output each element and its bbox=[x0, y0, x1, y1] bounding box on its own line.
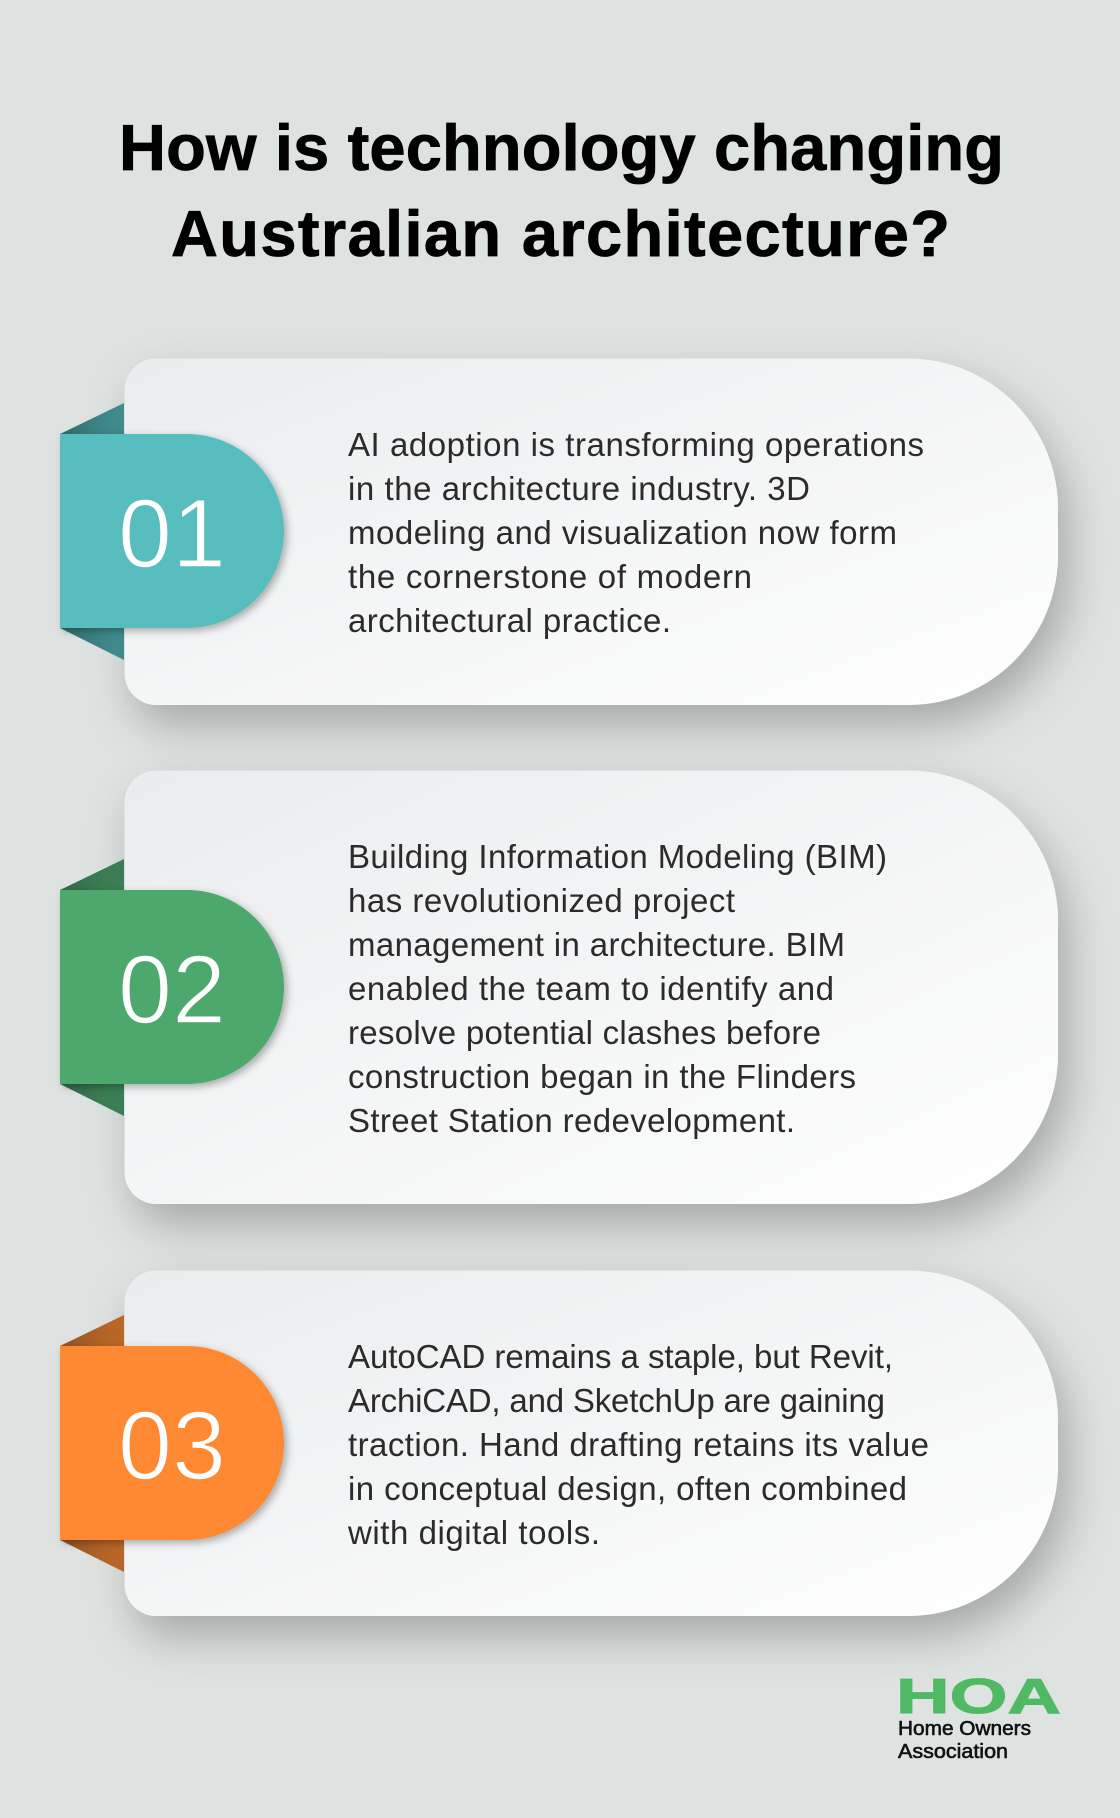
text: step 01: AI adoption is transforming operations bbox=[348, 426, 924, 463]
text: step 02: has revolutionized project bbox=[348, 882, 735, 919]
ribbon fold: step 02 bbox=[60, 859, 124, 1116]
text: step 03 bbox=[347, 1338, 929, 1551]
panel: step 03 bbox=[60, 1270, 1058, 1616]
text: step 02: enabled the team to identify and bbox=[348, 970, 834, 1007]
text: step 02: resolve potential clashes before bbox=[348, 1014, 821, 1051]
text: step 02: construction began in the Flinders bbox=[348, 1058, 856, 1095]
number: 03: 03 bbox=[118, 1391, 226, 1500]
text: step 01 bbox=[348, 426, 924, 639]
title: How is technology changing bbox=[119, 111, 1004, 184]
title bbox=[119, 111, 1004, 270]
text: step 03: ArchiCAD, and SketchUp are gaining bbox=[348, 1382, 885, 1419]
text: step 02 bbox=[348, 838, 887, 1139]
logo: HOA bbox=[896, 1670, 1061, 1763]
badge: step 03 bbox=[60, 1346, 284, 1540]
badge: step 02 bbox=[60, 890, 284, 1084]
logo: HOA: Home Owners bbox=[898, 1718, 1031, 1740]
card: step 02 bbox=[124, 770, 1058, 1204]
card: step 01 bbox=[124, 358, 1058, 705]
badge: step 01 bbox=[60, 434, 284, 628]
text: step 02: Building Information Modeling (BIM) bbox=[348, 838, 887, 875]
text: step 03: AutoCAD remains a staple, but Revit, bbox=[348, 1338, 893, 1375]
number: 02: 02 bbox=[118, 935, 226, 1044]
card: step 03 bbox=[124, 1270, 1058, 1616]
title: Australian architecture? bbox=[171, 197, 950, 270]
text: step 02: Street Station redevelopment. bbox=[348, 1102, 795, 1139]
text: step 02: management in architecture. BIM bbox=[348, 926, 845, 963]
ribbon fold: step 01 bbox=[60, 403, 124, 660]
text: step 01: the cornerstone of modern bbox=[348, 558, 752, 595]
text: step 01: modeling and visualization now form bbox=[348, 514, 897, 551]
text: step 03: with digital tools. bbox=[347, 1514, 600, 1551]
ribbon fold: step 03 bbox=[60, 1315, 124, 1572]
text: step 03: in conceptual design, often combined bbox=[348, 1470, 907, 1507]
logo: HOA: Association bbox=[898, 1741, 1008, 1763]
text: step 01: in the architecture industry. 3D bbox=[348, 470, 810, 507]
panel: step 02 bbox=[60, 770, 1058, 1204]
panel: step 01 bbox=[60, 358, 1058, 705]
text: step 03: traction. Hand drafting retains its value bbox=[348, 1426, 929, 1463]
logo: HOA: HOA bbox=[896, 1670, 1061, 1724]
number: 01: 01 bbox=[118, 479, 226, 588]
text: step 01: architectural practice. bbox=[348, 602, 671, 639]
